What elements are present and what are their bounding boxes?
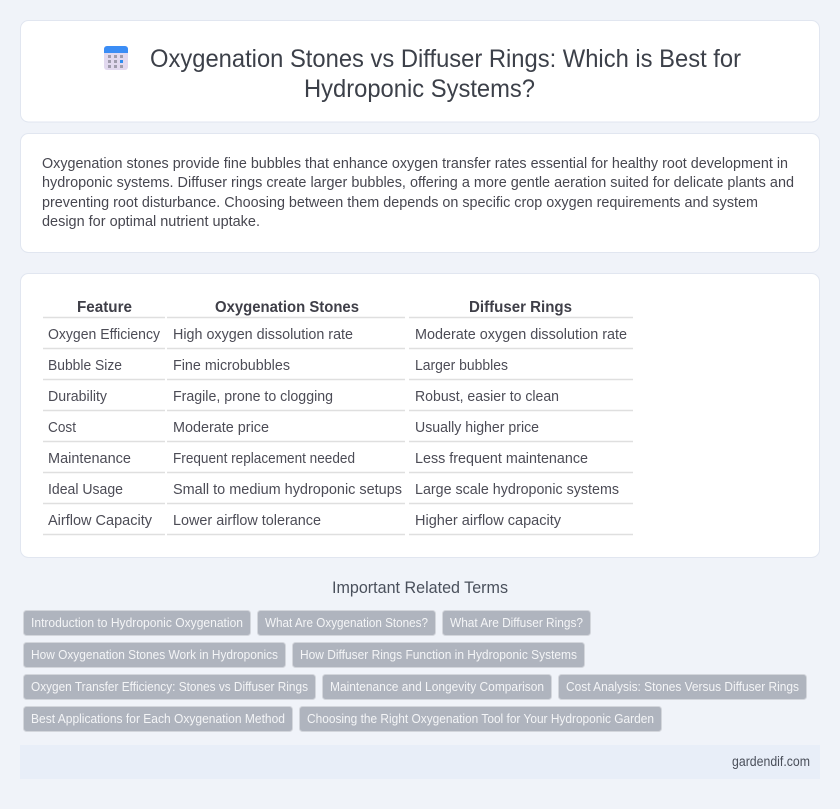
row: oxygen efficiency: High oxygen dissolution rate: [173, 327, 353, 343]
tag: Choosing the Right Oxygenation Tool for Your Hydroponic Garden: [307, 712, 654, 726]
panel: summary paragraph: [20, 134, 820, 252]
row: maintenance: Maintenance: [48, 451, 131, 467]
heading: important related terms: Important Related Terms: [332, 579, 508, 597]
row: cost: Usually higher price: [415, 420, 539, 436]
tag: Maintenance and Longevity Comparison: [330, 680, 544, 694]
footer: [20, 745, 820, 779]
table header row: [77, 299, 572, 316]
row: airflow capacity: Higher airflow capacity: [415, 513, 562, 529]
tag: [24, 610, 250, 636]
row: maintenance: [48, 451, 588, 467]
tag: [322, 674, 552, 700]
row: airflow capacity: Airflow Capacity: [48, 513, 153, 529]
tag: [300, 706, 662, 732]
row: ideal usage: Large scale hydroponic systems: [415, 482, 619, 498]
title: Hydroponic Systems?: [304, 75, 535, 103]
row: maintenance: Less frequent maintenance: [415, 451, 588, 467]
tag: [24, 642, 286, 668]
tag: [292, 642, 584, 668]
row: cost: Cost: [48, 420, 76, 436]
tag: How Oxygenation Stones Work in Hydroponics: [31, 648, 278, 662]
row: ideal usage: Ideal Usage: [48, 482, 123, 498]
row: cost: Moderate price: [173, 420, 269, 436]
panel: summary paragraph: design for optimal nutrient uptake.: [42, 214, 260, 230]
title: [150, 45, 741, 103]
tag: What Are Diffuser Rings?: [450, 616, 583, 630]
row: ideal usage: Small to medium hydroponic setups: [173, 482, 402, 498]
tag: What Are Oxygenation Stones?: [265, 616, 428, 630]
panel: header: [20, 20, 820, 122]
tag: [442, 610, 590, 636]
row: airflow capacity: Lower airflow tolerance: [173, 513, 321, 529]
table header row: Diffuser Rings: [469, 299, 572, 316]
row: cost: [48, 420, 539, 436]
row: durability: Fragile, prone to clogging: [173, 389, 333, 405]
related term tags: [24, 610, 806, 732]
tag: Oxygen Transfer Efficiency: Stones vs Diffuser Rings: [31, 680, 308, 694]
tag: Best Applications for Each Oxygenation Method: [31, 712, 285, 726]
panel: summary paragraph: hydroponic systems. Diffuser rings create larger bubbles, offering a more gentle aeration suited for delicate plants and: [42, 175, 794, 191]
row: bubble size: [48, 358, 508, 374]
panel: summary paragraph: Oxygenation stones provide fine bubbles that enhance oxygen transfer rates essential for healthy root development in: [42, 156, 788, 172]
row: oxygen efficiency: Oxygen Efficiency: [48, 327, 161, 343]
panel: comparison table: [20, 274, 820, 558]
tag: [558, 674, 806, 700]
footer: gardendif.com: [732, 754, 810, 769]
tag: Cost Analysis: Stones Versus Diffuser Rings: [566, 680, 799, 694]
row: ideal usage: [48, 482, 619, 498]
row: bubble size: Bubble Size: [48, 358, 122, 374]
table header row: Feature: [77, 299, 132, 316]
row: durability: [48, 389, 559, 405]
title: Oxygenation Stones vs Diffuser Rings: Which is Best for: [150, 45, 741, 73]
tag: [258, 610, 436, 636]
table header row: Oxygenation Stones: [215, 299, 359, 316]
row: durability: Durability: [48, 389, 108, 405]
tag: [24, 706, 292, 732]
tag: Introduction to Hydroponic Oxygenation: [31, 616, 243, 630]
icon: calendar: [104, 46, 128, 70]
row: bubble size: Fine microbubbles: [173, 358, 290, 374]
tag: How Diffuser Rings Function in Hydroponic Systems: [300, 648, 577, 662]
tag: [24, 674, 316, 700]
row: maintenance: Frequent replacement needed: [173, 451, 355, 467]
row: airflow capacity: [48, 513, 562, 529]
row: oxygen efficiency: Moderate oxygen dissolution rate: [415, 327, 627, 343]
row: bubble size: Larger bubbles: [415, 358, 508, 374]
row: durability: Robust, easier to clean: [415, 389, 559, 405]
row: oxygen efficiency: [48, 327, 627, 343]
panel: summary paragraph: preventing root disturbance. Choosing between them depends on specific crop oxygen requirements and system: [42, 195, 758, 211]
